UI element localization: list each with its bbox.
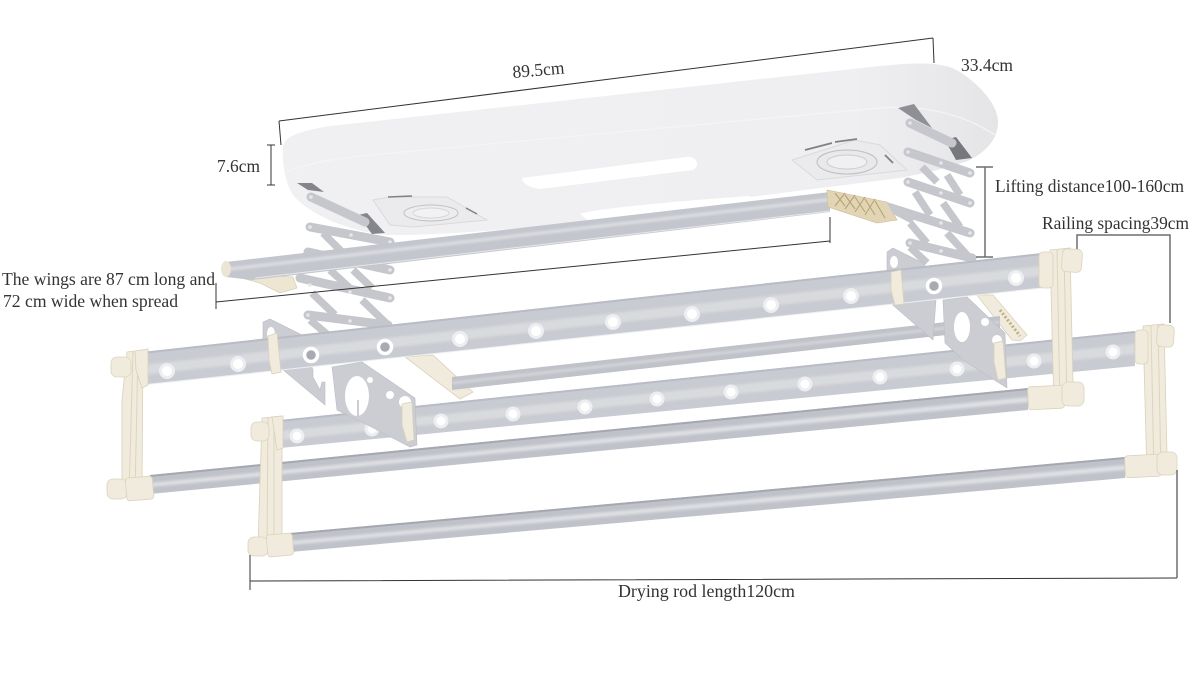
left plate clip	[268, 333, 281, 374]
right fan vent	[792, 139, 907, 180]
dimension: railing spacing: Railing spacing39cm	[1042, 213, 1189, 233]
rail two	[280, 331, 1135, 448]
left arm slots	[297, 183, 385, 234]
rail lights	[160, 272, 1022, 378]
pivot dots	[906, 121, 972, 253]
LED light strip	[580, 196, 750, 222]
dimension: drying rod length: Drying rod length120cm	[618, 581, 795, 601]
dimension: length 89.5cm	[279, 38, 934, 145]
right cream arm	[977, 295, 1027, 341]
wings label: The wings are 87 cm long and	[2, 269, 215, 289]
left fan vent	[373, 196, 487, 227]
lights rail one	[142, 253, 1042, 385]
dimension: length 89.5cm: 89.5cm	[512, 58, 565, 82]
right frame, lower	[1124, 324, 1177, 478]
dimension: lifting distance: Lifting distance100-160cm	[995, 176, 1184, 196]
rod three	[150, 388, 1028, 494]
rod four	[290, 457, 1125, 552]
right hanger plate	[943, 297, 1007, 388]
right scissor arm	[888, 121, 972, 263]
woven cream arm	[827, 190, 897, 223]
dimension: lifting distance	[976, 167, 1184, 257]
dimension: height 7.6cm: 7.6cm	[217, 156, 260, 176]
right frame, upper	[1027, 248, 1084, 410]
LED light panel	[522, 157, 697, 189]
upper inner rod with arm	[221, 190, 915, 293]
dimension: wings	[2, 217, 830, 311]
left scissor arm	[300, 195, 392, 335]
right end slots	[898, 104, 932, 128]
left hanger plate	[332, 362, 417, 447]
plate holes	[267, 256, 898, 341]
dimension: wings: 72 cm wide when spread	[3, 291, 178, 311]
ceiling unit body	[283, 64, 998, 235]
left outer frame	[107, 349, 154, 501]
right plate clip	[891, 270, 904, 305]
left inner frame	[248, 416, 294, 557]
right upper hanger plate	[887, 248, 936, 340]
dimension: railing spacing	[1042, 213, 1189, 323]
middle inner rod	[452, 316, 1000, 390]
middle cream arm	[405, 355, 473, 399]
left upper hanger plate	[263, 319, 325, 405]
rail two lights	[291, 346, 1119, 442]
dimension: depth 33.4cm: 33.4cm	[961, 55, 1013, 75]
dimension: height 7.6cm	[217, 145, 275, 185]
dimension: drying rod length	[250, 470, 1177, 601]
pivot dots	[306, 195, 392, 323]
